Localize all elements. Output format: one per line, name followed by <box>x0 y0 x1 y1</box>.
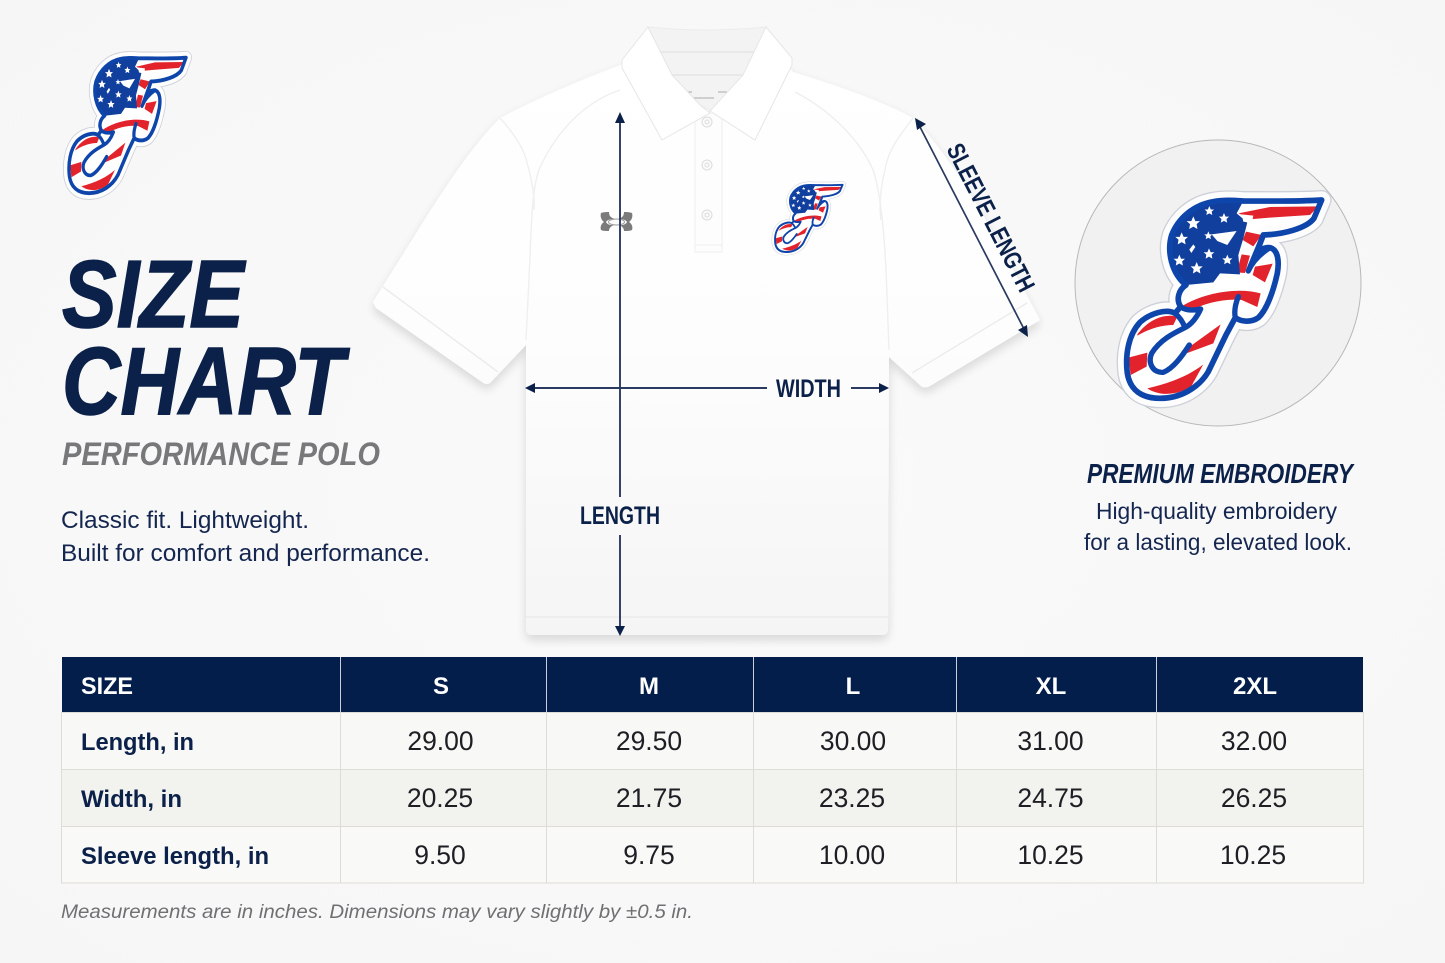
callout text: High-quality embroidery <box>1096 498 1337 524</box>
row: length <box>81 726 1287 756</box>
logo: close-up patch <box>1127 200 1322 398</box>
shirt body and sleeves <box>373 50 1040 635</box>
size table <box>62 657 1364 883</box>
table header: L <box>846 673 860 700</box>
description text <box>61 507 430 567</box>
row: width: 20.25 <box>407 783 473 813</box>
title: SIZE CHART: CHART <box>62 328 350 435</box>
row: sleeve length: 10.25 <box>1220 840 1286 870</box>
row: sleeve length: 9.50 <box>414 840 466 870</box>
row: width: 24.75 <box>1017 783 1084 813</box>
row: width: 23.25 <box>819 783 885 813</box>
row: width: 26.25 <box>1221 783 1287 813</box>
row: length: 32.00 <box>1221 726 1287 756</box>
callout text: for a lasting, elevated look. <box>1084 529 1352 555</box>
collar <box>622 27 710 140</box>
row: sleeve length: 10.25 <box>1017 840 1084 870</box>
arrow: length <box>615 112 625 636</box>
row backgrounds <box>62 712 1363 769</box>
row: length: Length, in <box>81 729 194 756</box>
table header: S <box>433 673 449 700</box>
callout text <box>1084 498 1352 555</box>
neck label marks <box>686 92 727 98</box>
row: sleeve length <box>81 840 1286 870</box>
placket <box>695 112 722 252</box>
table header <box>62 657 1363 712</box>
row: width <box>81 783 1287 813</box>
row: sleeve length: 10.00 <box>819 840 885 870</box>
title: SIZE CHART: SIZE <box>62 241 247 348</box>
table header: SIZE <box>81 673 133 700</box>
title: SIZE CHART <box>62 241 350 435</box>
label: width: WIDTH <box>776 375 841 403</box>
table grid <box>62 712 1364 883</box>
row: length: 29.00 <box>407 726 474 756</box>
row: length: 29.50 <box>616 726 682 756</box>
buttons <box>702 117 712 220</box>
callout heading: premium embroidery: PREMIUM EMBROIDERY <box>1087 458 1355 489</box>
subtitle: performance polo: PERFORMANCE POLO <box>62 436 380 472</box>
logo: chest patch <box>775 185 843 252</box>
table header: M <box>639 673 659 700</box>
description text: Classic fit. Lightweight. <box>61 507 309 534</box>
table header: 2XL <box>1233 673 1277 700</box>
row: length: 30.00 <box>820 726 886 756</box>
row: length: 31.00 <box>1017 726 1084 756</box>
embroidery close-up circle <box>1075 140 1361 426</box>
label: length: LENGTH <box>580 502 660 530</box>
label: sleeve length: SLEEVE LENGTH <box>941 139 1040 297</box>
row: sleeve length: 9.75 <box>623 840 675 870</box>
arrow: sleeve length <box>915 118 1028 337</box>
row: width: Width, in <box>81 786 182 813</box>
polo shirt illustration <box>373 27 1040 635</box>
row: sleeve length: Sleeve length, in <box>81 843 269 870</box>
arrow: width <box>525 383 889 393</box>
footnote: Measurements are in inches. Dimensions may vary slightly by ±0.5 in. <box>61 902 693 923</box>
description text: Built for comfort and performance. <box>61 540 430 567</box>
logo: top-left flag F patch <box>69 58 186 193</box>
collar inside <box>648 27 766 112</box>
table header: XL <box>1036 673 1066 700</box>
row: width: 21.75 <box>616 783 682 813</box>
seams <box>383 90 1027 617</box>
icon: under armour logo <box>601 212 632 231</box>
